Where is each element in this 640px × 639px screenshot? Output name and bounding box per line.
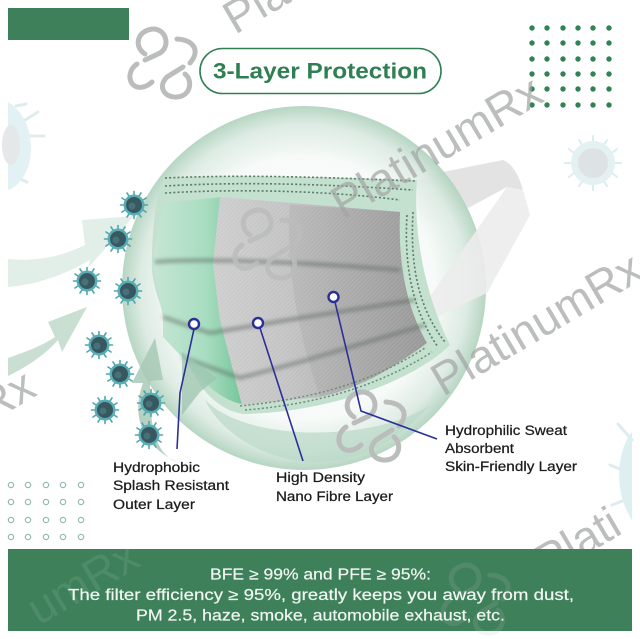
logo watermark 2 bbox=[235, 210, 300, 278]
watermark 1: PlatinumRx bbox=[322, 64, 551, 229]
label: skin layer: Hydrophilic Sweat bbox=[445, 423, 567, 438]
label: outer layer bbox=[113, 460, 229, 512]
mask green outer layer bbox=[152, 197, 242, 404]
footer banner bbox=[8, 529, 632, 635]
mask gray inner layer bbox=[213, 197, 427, 405]
mask top stitching bbox=[165, 176, 415, 200]
footer text: BFE ≥ 99% and PFE ≥ 95%: bbox=[210, 566, 431, 584]
callout line: nano layer bbox=[253, 318, 303, 461]
callout line: skin layer bbox=[328, 292, 437, 439]
mask folds bbox=[155, 260, 425, 378]
watermark 4: Plati bbox=[526, 496, 629, 587]
glass sphere bbox=[122, 106, 486, 470]
mask bottom stitching bbox=[240, 348, 432, 410]
logo watermark 3 bbox=[339, 392, 404, 460]
logo watermark 1 bbox=[130, 29, 195, 97]
dot grid top right bbox=[529, 25, 612, 108]
label: outer layer: Hydrophobic bbox=[113, 460, 200, 475]
label: skin layer bbox=[445, 423, 578, 474]
footer text: The filter efficiency ≥ 95%, greatly keeps you away from dust, bbox=[68, 587, 574, 604]
mask outer band bbox=[152, 176, 450, 414]
footer logo watermark bbox=[443, 565, 508, 633]
mask right stitching bbox=[406, 212, 445, 347]
footer text bbox=[68, 566, 574, 624]
ear strap front bbox=[424, 187, 530, 320]
top-left green tab bbox=[8, 8, 129, 40]
title: 3-Layer Protection bbox=[213, 58, 427, 84]
label: outer layer: Outer Layer bbox=[113, 497, 196, 512]
mask bbox=[152, 176, 450, 414]
arrow 2 bbox=[8, 307, 87, 376]
label: nano layer: High Density bbox=[276, 470, 365, 485]
ear strap back bbox=[417, 160, 523, 225]
arrow 3 bbox=[132, 338, 177, 462]
pale virus left bbox=[2, 102, 44, 190]
virus cluster bbox=[74, 192, 164, 448]
pale virus bottom right bbox=[610, 424, 632, 520]
arrow 4 bbox=[182, 352, 217, 415]
lower swoosh bbox=[205, 400, 430, 462]
arrow 1 bbox=[8, 216, 134, 287]
footer text: PM 2.5, haze, smoke, automobile exhaust, etc. bbox=[136, 608, 505, 624]
callout line: outer layer bbox=[177, 319, 199, 449]
label: outer layer: Splash Resistant bbox=[113, 478, 229, 493]
pale virus top right bbox=[565, 136, 621, 190]
footer watermark: umRx bbox=[18, 529, 148, 635]
label: nano layer: Nano Fibre Layer bbox=[276, 489, 394, 504]
label: skin layer: Skin-Friendly Layer bbox=[445, 459, 578, 474]
label: skin layer: Absorbent bbox=[445, 441, 514, 456]
label: nano layer bbox=[276, 470, 394, 504]
mask inner panel shade bbox=[289, 205, 427, 397]
title pill bbox=[200, 48, 441, 94]
ring grid bottom left bbox=[8, 482, 84, 540]
